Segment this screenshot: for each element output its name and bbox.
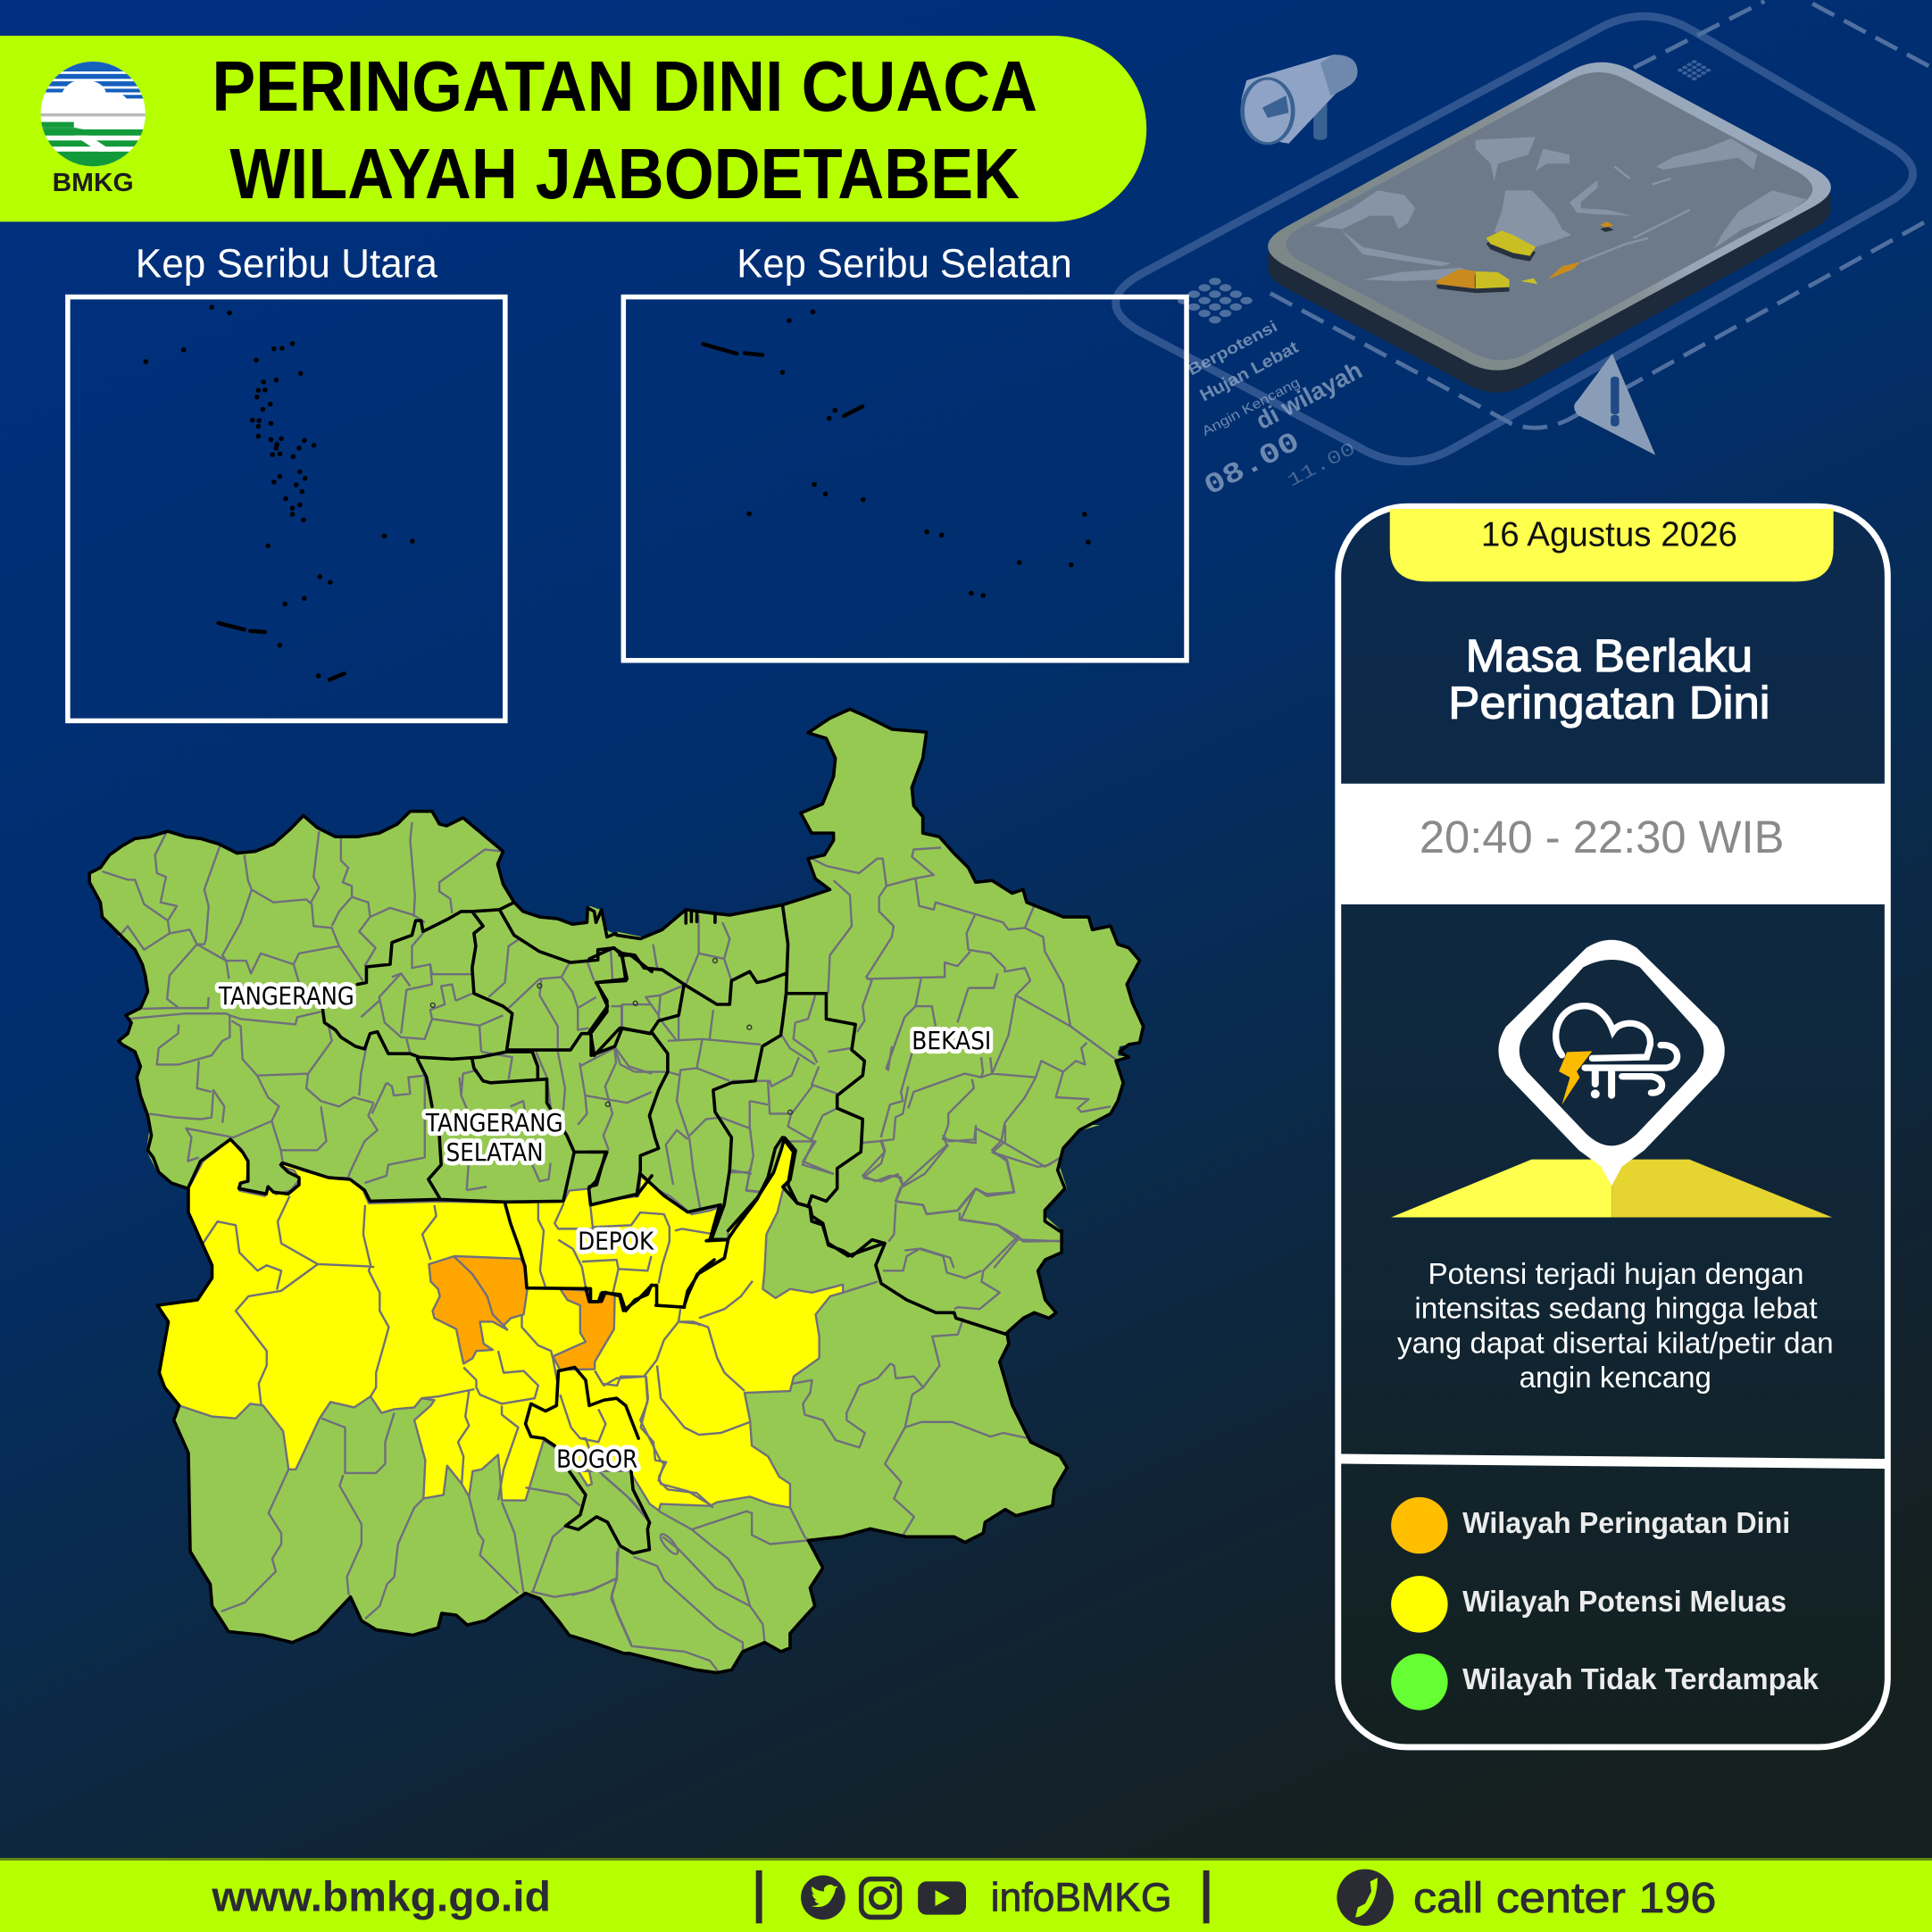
islands bbox=[146, 307, 412, 679]
icon: twitter bbox=[801, 1876, 845, 1920]
heading: Kep Seribu Selatan bbox=[737, 241, 1072, 287]
header banner bbox=[0, 36, 1146, 221]
regency boundaries south bbox=[526, 1137, 1007, 1553]
date tab bbox=[1390, 509, 1834, 581]
isometric small text bbox=[1185, 317, 1367, 504]
icon: storm marker on yellow base bbox=[1391, 940, 1832, 1218]
district lines south west bbox=[203, 1196, 714, 1645]
tablet map bbox=[1314, 137, 1806, 293]
map zone: orange early warning west bbox=[429, 1256, 528, 1363]
panel: Kep Seribu Utara inset bbox=[68, 241, 505, 720]
map fill: green south bbox=[146, 1125, 1100, 1673]
panel: Kep Seribu Selatan inset bbox=[623, 241, 1187, 661]
map: Jabodetabek warning zones bbox=[89, 709, 1144, 1673]
description text: Potensi terjadi hujan dengan bbox=[1428, 1258, 1803, 1291]
icon: phone bbox=[1337, 1870, 1394, 1926]
district lines northeast bbox=[612, 847, 1118, 1268]
isometric small text: Hujan Lebat bbox=[1197, 337, 1302, 405]
description text: yang dapat disertai kilat/petir dan bbox=[1397, 1327, 1834, 1360]
isometric small text: Berpotensi bbox=[1185, 317, 1280, 379]
map labels: DEPOK bbox=[578, 1226, 654, 1255]
title: WILAYAH JABODETABEK bbox=[229, 134, 1020, 213]
map labels: TANGERANG bbox=[218, 981, 354, 1011]
social handle: infoBMKG bbox=[991, 1875, 1171, 1920]
panel: validity info and legend bbox=[1338, 506, 1887, 1747]
icon: BMKG logo bbox=[41, 62, 146, 191]
icon: instagram bbox=[862, 1879, 899, 1917]
isometric small text: 11.00 bbox=[1285, 439, 1360, 492]
district lines northwest bbox=[102, 822, 652, 1190]
map zone: orange early warning east bbox=[553, 1289, 615, 1370]
description text: angin kencang bbox=[1520, 1362, 1711, 1395]
map labels: BOGOR bbox=[556, 1445, 637, 1474]
regency boundaries northwest bbox=[187, 903, 652, 1311]
isometric small text: di wilayah bbox=[1251, 356, 1367, 435]
district lines south east bbox=[571, 1125, 1060, 1673]
footer bar bbox=[0, 1858, 1932, 1932]
isometric small text: Angin Kencang bbox=[1200, 375, 1303, 439]
icon: warning triangle bbox=[1574, 354, 1655, 455]
regency boundaries northeast bbox=[589, 905, 885, 1256]
map fill: green northeast bbox=[589, 709, 1144, 1268]
legend: Wilayah Peringatan Dini bbox=[1462, 1507, 1790, 1540]
title: PERINGATAN DINI CUACA bbox=[212, 46, 1037, 126]
date tab: 16 Agustus 2026 bbox=[1481, 515, 1737, 554]
description text bbox=[1397, 1258, 1834, 1395]
time band: 20:40 - 22:30 WIB bbox=[1420, 812, 1784, 862]
description text: intensitas sedang hingga lebat bbox=[1414, 1293, 1818, 1326]
islands bbox=[704, 312, 1088, 595]
decorative illustration: tablet with warning map bbox=[1116, 1, 1932, 504]
title bbox=[212, 46, 1037, 213]
call center: call center 196 bbox=[1413, 1874, 1716, 1922]
legend: Wilayah Tidak Terdampak bbox=[1462, 1663, 1820, 1696]
heading: Masa Berlaku: Masa Berlaku bbox=[1466, 630, 1753, 681]
website: www.bmkg.go.id bbox=[211, 1874, 551, 1920]
map labels bbox=[218, 981, 991, 1474]
isometric small text: 08.00 bbox=[1199, 426, 1305, 504]
heading: Masa Berlaku bbox=[1448, 630, 1770, 729]
time band bbox=[1341, 784, 1886, 904]
icon: megaphone bbox=[1241, 54, 1357, 144]
heading: Kep Seribu Utara bbox=[136, 241, 438, 287]
map labels: TANGERANG bbox=[425, 1108, 563, 1137]
map labels: BEKASI bbox=[912, 1026, 991, 1055]
icon: BMKG logo: BMKG bbox=[53, 169, 134, 197]
map fill: green northwest bbox=[89, 812, 652, 1260]
icon: youtube bbox=[918, 1881, 966, 1915]
dot grids bbox=[1184, 62, 1708, 320]
legend: Wilayah Potensi Meluas bbox=[1462, 1586, 1786, 1619]
tablet body bbox=[1268, 62, 1831, 393]
map labels: SELATAN bbox=[446, 1137, 544, 1167]
legend bbox=[1391, 1497, 1820, 1711]
heading: Masa Berlaku: Peringatan Dini bbox=[1448, 678, 1770, 729]
map coastline bbox=[89, 709, 1144, 1673]
map zone: yellow potential spread bbox=[157, 1137, 843, 1511]
